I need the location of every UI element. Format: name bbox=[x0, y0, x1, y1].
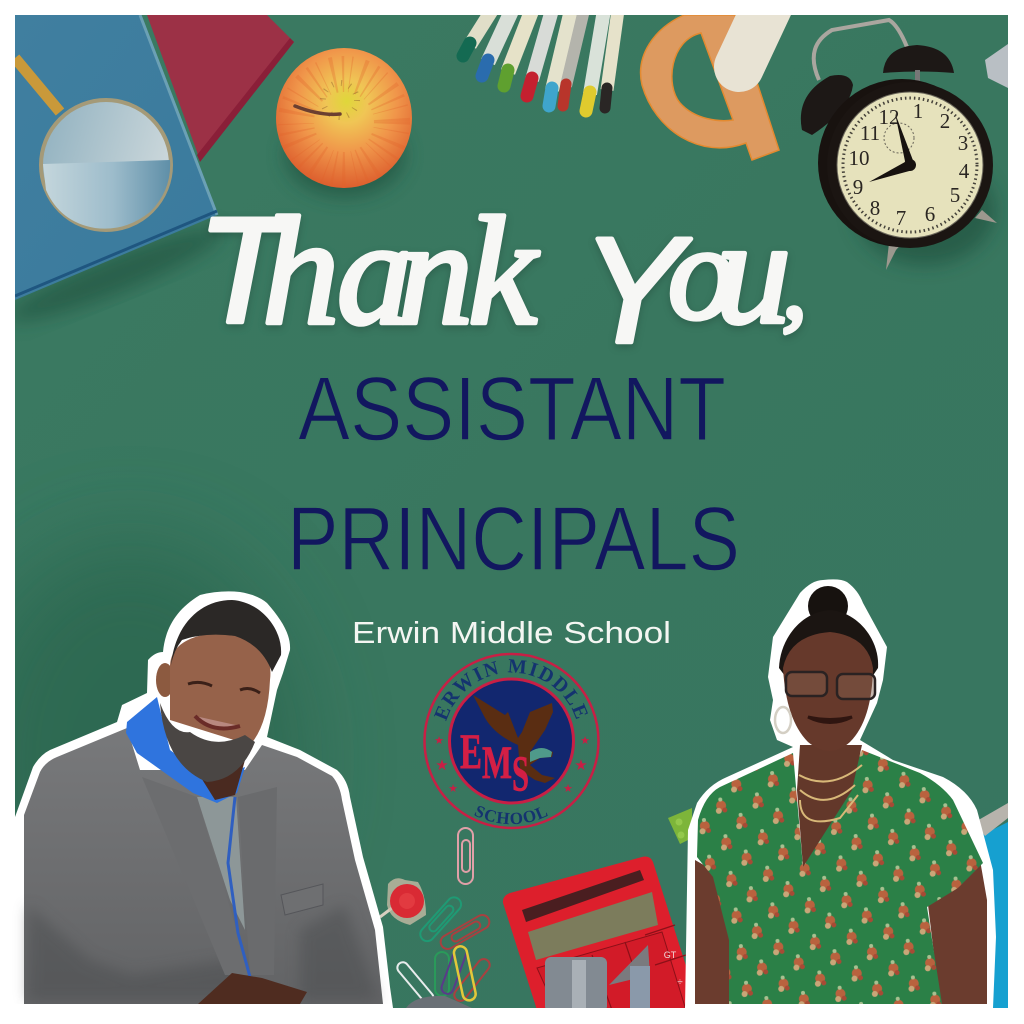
logo: Erwin Middle School crest: ★ bbox=[563, 783, 573, 795]
icon: magnifying glass bbox=[15, 58, 171, 230]
woman dress bbox=[697, 750, 983, 1004]
icon: alarm clock: 7 bbox=[896, 206, 906, 230]
icon: apple bbox=[276, 48, 412, 197]
icon: alarm clock: 11 bbox=[860, 121, 880, 145]
woman arms bbox=[695, 860, 987, 1004]
icon: alarm clock: 5 bbox=[950, 183, 960, 207]
icon: grey cup and clip bbox=[406, 945, 650, 1012]
heading: Thank You,: o bbox=[668, 199, 736, 348]
logo: Erwin Middle School crest: ERWIN MIDDLE bbox=[434, 659, 588, 721]
icon: metal object top right bbox=[985, 44, 1008, 88]
icon: alarm clock: 4 bbox=[959, 159, 970, 183]
icon: alarm clock: 8 bbox=[870, 196, 880, 220]
logo: Erwin Middle School crest: S bbox=[512, 747, 529, 803]
heading: Thank You,: k bbox=[468, 185, 540, 357]
icon: alarm clock: 6 bbox=[925, 202, 935, 226]
heading: ASSISTANT: ASSISTANT bbox=[298, 359, 726, 460]
icon: stacked books bbox=[2, 15, 294, 335]
photo cutout: assistant principal woman bbox=[685, 579, 996, 1008]
icon: red calculator: ÷ bbox=[677, 977, 683, 988]
woman white sticker outline bbox=[685, 579, 996, 1008]
logo: Erwin Middle School crest: ★ bbox=[574, 757, 588, 774]
woman hair and bun bbox=[779, 586, 878, 680]
woman figure bbox=[695, 586, 987, 1004]
icon: blue folder and scissors corner bbox=[980, 803, 1008, 1008]
icon: red calculator bbox=[503, 857, 700, 1010]
heading: PRINCIPALS: PRINCIPALS bbox=[287, 489, 740, 590]
woman neck and chest bbox=[797, 745, 862, 867]
icon: alarm clock: 12 bbox=[878, 105, 900, 129]
man blue scarf bbox=[126, 697, 245, 803]
heading: Thank You,: u bbox=[716, 189, 791, 355]
logo: Erwin Middle School crest: M bbox=[482, 737, 512, 789]
icon: alarm clock bbox=[801, 20, 997, 270]
icon: protractor and eraser bbox=[641, 5, 779, 160]
man jacket shading bbox=[28, 905, 378, 1000]
heading: Thank You,: n bbox=[398, 190, 473, 356]
logo: Erwin Middle School crest bbox=[423, 652, 600, 830]
woman smile bbox=[808, 717, 852, 722]
man shirt and lapels bbox=[197, 787, 324, 976]
icon: alarm clock: 3 bbox=[958, 131, 968, 155]
logo: Erwin Middle School crest: ★ bbox=[448, 783, 458, 795]
woman face bbox=[783, 632, 873, 751]
heading: Thank You,: Y bbox=[582, 206, 692, 374]
woman glasses bbox=[786, 672, 875, 699]
man hair bbox=[171, 600, 281, 672]
man white sticker outline bbox=[15, 591, 393, 1008]
logo: Erwin Middle School crest: E bbox=[460, 723, 482, 779]
man neck, ear and face bbox=[156, 632, 270, 800]
text: school name: Erwin Middle School bbox=[352, 615, 671, 650]
icon: alarm clock: 10 bbox=[848, 146, 870, 170]
man beard bbox=[160, 703, 255, 782]
logo: Erwin Middle School crest: ★ bbox=[580, 735, 590, 747]
heading: Thank You,: T bbox=[197, 186, 298, 354]
icon: green block bbox=[668, 808, 692, 844]
man body bbox=[24, 600, 383, 1004]
woman necklaces bbox=[799, 765, 862, 821]
icon: crayons bbox=[463, 10, 618, 111]
logo: Erwin Middle School crest: ★ bbox=[434, 735, 444, 747]
logo: Erwin Middle School crest: ★ bbox=[435, 757, 449, 774]
photo cutout: assistant principal man bbox=[15, 591, 393, 1008]
man jacket bbox=[24, 728, 383, 1004]
icon: alarm clock: 2 bbox=[940, 109, 950, 133]
logo: Erwin Middle School crest: SCHOOL bbox=[474, 806, 548, 824]
heading: Thank You,: h bbox=[262, 185, 340, 357]
icon: red pin bbox=[380, 878, 426, 925]
heading: Thank You,: , bbox=[782, 229, 807, 340]
icon: alarm clock: 1 bbox=[913, 99, 923, 123]
icon: alarm clock: 9 bbox=[853, 175, 863, 199]
icon: red calculator: GT bbox=[664, 950, 677, 960]
heading: Thank You,: a bbox=[337, 190, 412, 356]
man clasped hands bbox=[198, 973, 307, 1004]
icon: paper clips bbox=[395, 828, 492, 1005]
woman earring bbox=[775, 707, 791, 733]
